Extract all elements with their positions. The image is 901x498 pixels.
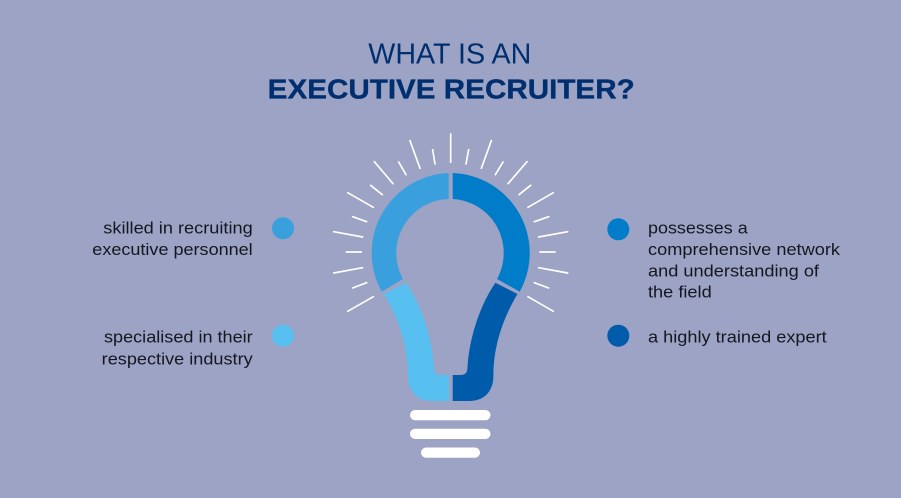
item: highly trained expert — [607, 325, 827, 347]
bulb segment: upper right — [453, 173, 530, 292]
bulb base bars — [410, 410, 490, 458]
item: possesses a network: comprehensive network — [648, 240, 841, 259]
item: possesses a network: possesses a — [648, 218, 748, 237]
item: possesses a network — [607, 218, 841, 302]
item: possesses a network: the field — [648, 283, 712, 302]
item: skilled in recruiting: executive personnel — [92, 240, 253, 259]
title: EXECUTIVE RECRUITER? — [268, 73, 635, 104]
item: specialised in their industry: specialised in their — [104, 328, 253, 347]
title: WHAT IS AN — [368, 38, 531, 70]
item: possesses a network: and understanding of — [648, 261, 819, 280]
light rays — [334, 134, 568, 311]
item: skilled in recruiting: skilled in recruiting — [103, 218, 253, 237]
item: specialised in their industry: respective industry — [102, 349, 253, 368]
bulb segment: upper left — [372, 173, 449, 292]
title — [268, 38, 635, 104]
item: specialised in their industry — [102, 325, 294, 368]
bulb segment: lower right — [453, 283, 517, 401]
item: highly trained expert: a highly trained expert — [648, 328, 827, 347]
icon: light bulb — [334, 134, 568, 458]
item: skilled in recruiting — [92, 217, 294, 259]
bulb segment: lower left — [384, 283, 449, 401]
